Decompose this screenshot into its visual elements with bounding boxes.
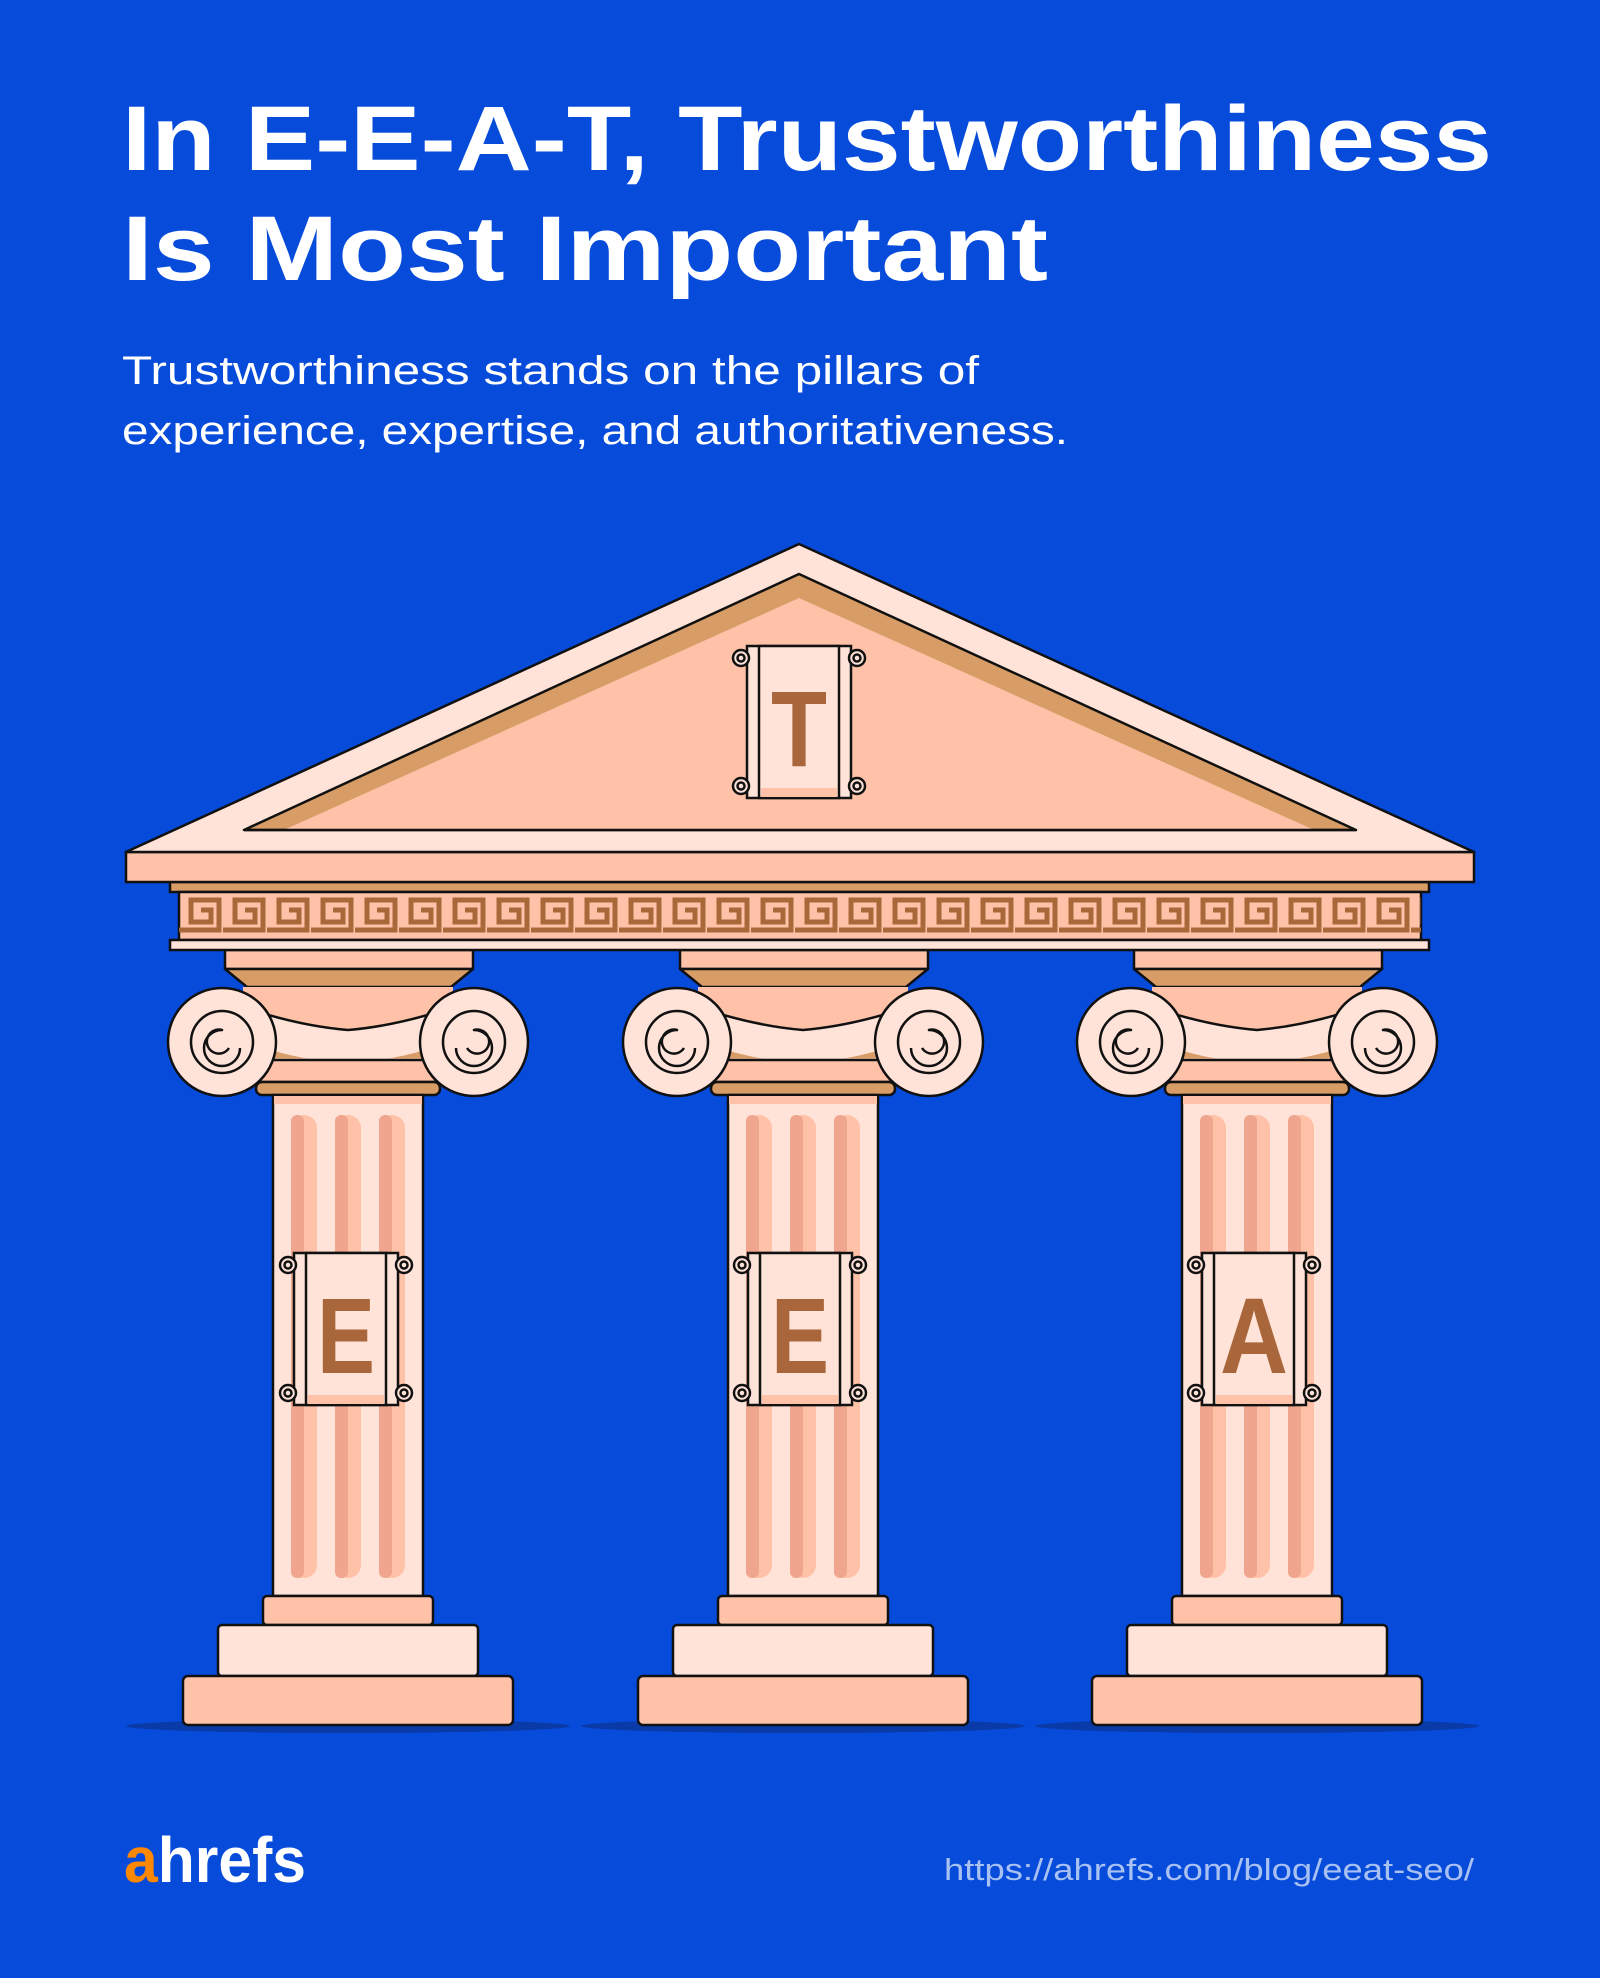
roof pediment <box>126 544 1474 852</box>
title: Is Most Important <box>122 198 1048 300</box>
entablature <box>126 852 1474 950</box>
subtitle: experience, expertise, and authoritativeness. <box>122 409 1068 453</box>
scroll A: A <box>1220 1275 1288 1396</box>
scroll E2 <box>734 1253 866 1405</box>
shadows <box>126 1719 1479 1733</box>
scroll A <box>1188 1253 1320 1405</box>
scroll T <box>733 646 865 798</box>
scroll E: E <box>317 1275 375 1396</box>
subtitle <box>122 349 1068 453</box>
subtitle: Trustworthiness stands on the pillars of <box>122 349 980 393</box>
column: E experience <box>168 950 528 1725</box>
title: In E-E-A-T, Trustworthiness <box>122 88 1492 190</box>
logo: ahrefs <box>124 1824 306 1896</box>
title <box>122 88 1492 300</box>
scroll T: T <box>771 668 827 789</box>
scroll E <box>280 1253 412 1405</box>
column: E expertise <box>623 950 983 1725</box>
column: A authoritativeness <box>1077 950 1437 1725</box>
url: https://ahrefs.com/blog/eeat-seo/ <box>944 1852 1474 1887</box>
scroll E2: E <box>771 1275 829 1396</box>
